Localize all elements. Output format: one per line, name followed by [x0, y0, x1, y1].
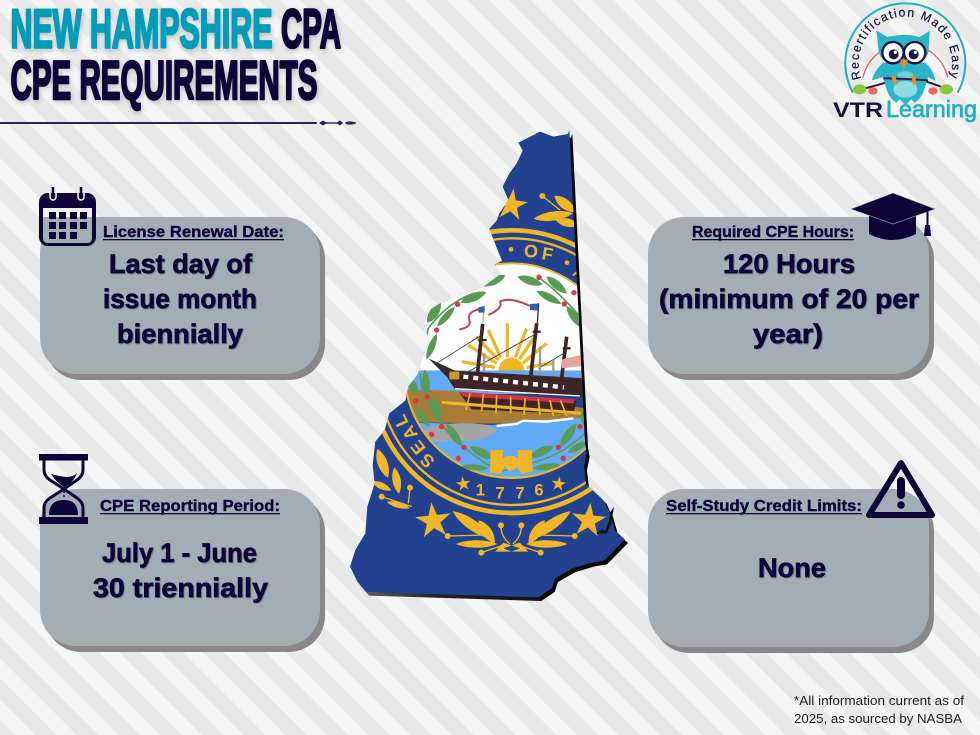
map shadow	[353, 134, 628, 601]
logo: VTR Learning: Learning	[886, 96, 977, 122]
label: Required CPE Hours:	[692, 224, 854, 241]
panel: license renewal date	[39, 187, 325, 380]
icon: warning triangle	[869, 463, 932, 515]
value	[659, 249, 920, 349]
seal lettering: 1	[476, 480, 485, 499]
logo tagline	[859, 16, 952, 79]
card shadow	[45, 495, 325, 652]
seal lettering: S	[416, 449, 439, 472]
map flag artwork	[350, 130, 625, 598]
logo wordmark: VTR	[833, 99, 883, 122]
icon: hourglass	[39, 454, 88, 524]
label: Self-Study Credit Limits:	[666, 498, 862, 515]
value	[93, 538, 268, 603]
label: CPE Reporting Period:	[100, 498, 280, 515]
seal inner scene	[406, 264, 586, 477]
value: year)	[753, 319, 823, 349]
seal inner ring	[406, 262, 586, 479]
seal lettering: A	[570, 265, 586, 283]
seal lettering: 7	[515, 483, 525, 502]
value: 30 triennially	[93, 573, 268, 603]
wreath	[407, 272, 588, 474]
owl body	[872, 63, 935, 105]
map: New Hampshire state flag	[350, 130, 628, 601]
value: 120 Hours	[723, 249, 855, 279]
value	[103, 249, 257, 349]
icon: graduation cap	[851, 193, 935, 240]
panel: required CPE hours	[648, 193, 935, 380]
seal lettering: 7	[495, 483, 505, 502]
card	[40, 489, 320, 646]
value: (minimum of 20 per	[659, 284, 920, 314]
card	[648, 489, 929, 647]
seal rings	[382, 228, 593, 516]
value: issue month	[103, 284, 257, 314]
seal lettering: O	[524, 241, 539, 262]
card shadow	[653, 223, 934, 380]
card shadow	[45, 223, 325, 380]
label: License Renewal Date:	[103, 224, 284, 241]
card shadow	[653, 495, 934, 653]
seal lettering	[390, 241, 586, 502]
footnote: 2025, as sourced by NASBA	[794, 711, 962, 726]
footnote	[794, 693, 964, 726]
flag stars	[414, 186, 608, 538]
card	[648, 217, 929, 374]
seal lettering: F	[540, 243, 555, 265]
icon: owl	[853, 30, 953, 105]
logo: VTR Learning	[833, 2, 977, 122]
seal lettering: L	[390, 412, 412, 430]
logo: VTR Learning: Recertification Made Easy	[852, 8, 960, 80]
panel: self-study credit limits	[648, 463, 934, 653]
seal lettering: E	[406, 436, 430, 458]
title: CPE REQUIREMENTS	[10, 49, 318, 111]
value: Last day of	[109, 249, 253, 279]
card	[40, 217, 320, 374]
laurel branches	[371, 192, 580, 556]
icon: calendar	[39, 187, 96, 246]
value: July 1 - June	[102, 538, 257, 568]
panel: CPE reporting period	[39, 454, 325, 652]
footnote: *All information current as of	[794, 693, 964, 708]
coastline island	[596, 507, 614, 534]
value: None	[758, 553, 826, 583]
title	[10, 0, 341, 111]
seal lettering: A	[398, 422, 422, 443]
seal lettering: 6	[534, 480, 544, 499]
value: biennially	[117, 319, 243, 349]
ship	[428, 300, 585, 416]
logo red arc	[863, 44, 948, 78]
sun	[462, 323, 553, 371]
title divider with ornament	[0, 120, 356, 126]
owl head	[876, 30, 930, 66]
logo ring	[845, 3, 965, 93]
